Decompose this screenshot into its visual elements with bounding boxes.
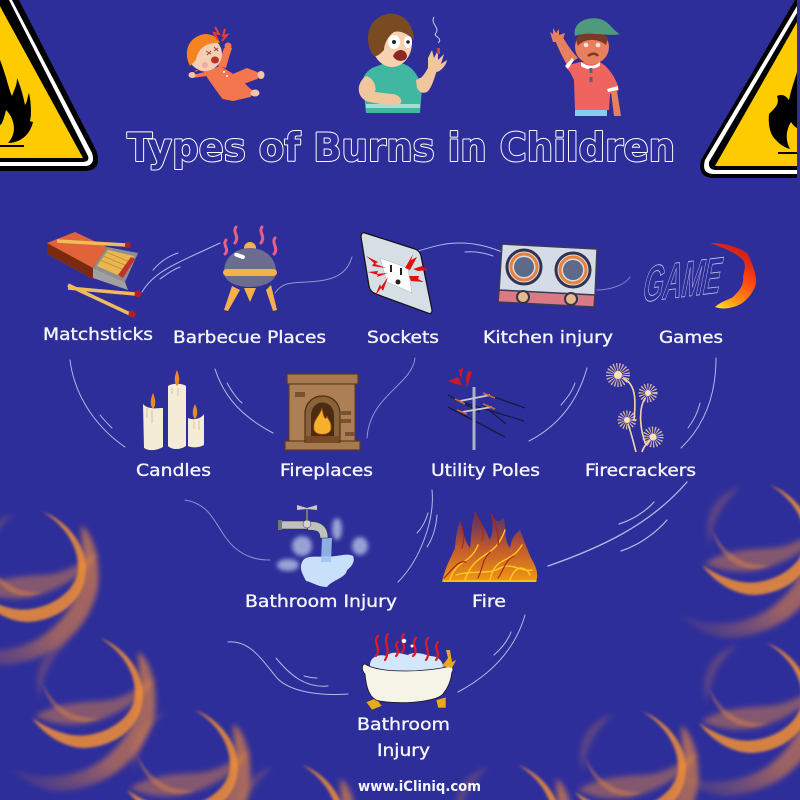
icon: barbecue grill — [223, 227, 277, 311]
item: sockets — [361, 233, 439, 348]
icon: right warning triangle — [700, 0, 797, 178]
icon: gas stove — [498, 244, 597, 307]
icon: utility pole with sparks — [448, 368, 525, 450]
label: Kitchen injury: Kitchen injury — [483, 328, 613, 348]
icon: firework bursts — [611, 368, 659, 452]
item: barbecue places — [173, 227, 326, 348]
connector curves — [70, 243, 716, 694]
item: fire — [442, 512, 537, 612]
label: Fireplaces: Fireplaces — [280, 461, 373, 481]
item: firecrackers — [585, 368, 696, 481]
item: candles — [136, 370, 211, 481]
item: kitchen injury — [483, 244, 613, 348]
icon: steaming bathtub — [362, 634, 456, 710]
icon: boy with burned hand — [359, 14, 447, 113]
label: Games: Games — [659, 328, 723, 348]
label: Bathroom: Bathroom — [357, 715, 450, 735]
label: Matchsticks: Matchsticks — [43, 325, 153, 345]
item: matchsticks — [43, 232, 153, 345]
label: Fire: Fire — [472, 592, 506, 612]
label: Sockets: Sockets — [367, 328, 439, 348]
label: Candles: Candles — [136, 461, 211, 481]
icon: running faucet with steam — [277, 505, 368, 587]
item: bathtub — [357, 634, 456, 735]
label: Utility Poles: Utility Poles — [431, 461, 540, 481]
title: Types of Burns in Children — [127, 126, 675, 171]
label: Bathroom Injury: Bathroom Injury — [245, 592, 397, 612]
icon: three candles — [143, 370, 204, 450]
item: fireplaces — [280, 374, 373, 481]
item: utility poles — [431, 368, 540, 481]
icon: sparking socket — [361, 233, 432, 314]
icon: boy with cap — [550, 18, 621, 116]
label: Barbecue Places: Barbecue Places — [173, 328, 326, 348]
icon: crying baby — [187, 27, 264, 100]
label: Firecrackers: Firecrackers — [585, 461, 696, 481]
icon: game wordmark with flame: GAME — [639, 246, 727, 313]
icon: matchbox — [47, 232, 142, 318]
website url: www.iCliniq.com — [358, 779, 481, 795]
label: Injury: Injury — [377, 741, 430, 761]
item: games — [639, 243, 756, 348]
icon: left warning triangle — [0, 0, 98, 171]
item: bathroom injury faucet — [245, 505, 397, 612]
icon: flames — [442, 512, 537, 582]
icon: brick fireplace — [285, 374, 360, 450]
